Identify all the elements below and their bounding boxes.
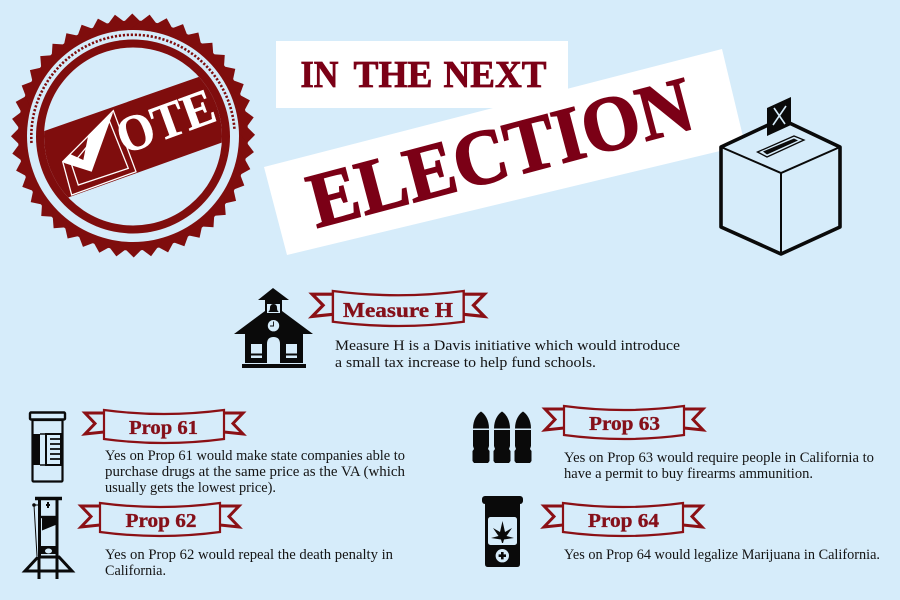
text: Measure H description: Measure H is a Davis initiative which would introduce [335, 338, 680, 354]
text: Prop 61 description [105, 448, 406, 496]
icon: medicine bottle [30, 412, 65, 482]
seal word: OTE: OTE [109, 79, 223, 166]
heading: in the next: IN [300, 54, 339, 96]
banner: Prop 61 [85, 410, 243, 443]
text: Prop 64 description: Yes on Prop 64 would legalize Marijuana in California. [564, 547, 880, 563]
banner: Measure H [312, 291, 484, 326]
icon: check box [63, 111, 136, 195]
banner: Prop 62 [81, 503, 239, 536]
ballot paper [767, 97, 791, 136]
banner: Prop 64 [544, 503, 702, 536]
banner: Prop 61: Prop 61 [129, 418, 198, 439]
icon: guillotine [25, 498, 72, 579]
text: Prop 63 description: Yes on Prop 63 would require people in California to [564, 450, 874, 466]
text: Prop 61 description: Yes on Prop 61 would make state companies able to [105, 448, 405, 464]
text: Prop 61 description: purchase drugs at the same price as the VA (which [105, 464, 406, 480]
text: Prop 62 description: California. [105, 563, 166, 579]
banner: Prop 62: Prop 62 [126, 511, 196, 532]
text: Measure H description: a small tax increase to help fund schools. [335, 355, 596, 371]
icon: vote seal [11, 14, 255, 258]
heading: in the next [276, 41, 568, 108]
ballot slot [758, 136, 804, 157]
banner: Prop 63: Prop 63 [589, 414, 660, 435]
icon: schoolhouse [234, 288, 313, 368]
text: Prop 62 description: Yes on Prop 62 would repeal the death penalty in [105, 547, 394, 563]
banner: Prop 64: Prop 64 [588, 511, 659, 532]
heading: election: ELECTION [299, 60, 702, 244]
icon: marijuana bottle [482, 496, 523, 567]
cannabis leaf [491, 521, 514, 543]
heading: in the next: NEXT [444, 54, 547, 96]
text: Prop 63 description: have a permit to buy firearms ammunition. [564, 466, 813, 482]
banner: Measure H: Measure H [343, 298, 453, 322]
text: Prop 62 description [105, 547, 394, 579]
icon: bullets [472, 412, 532, 463]
icon: ballot box [721, 97, 840, 254]
text: Measure H description [335, 338, 680, 371]
heading: in the next: THE [354, 54, 432, 96]
text: Prop 63 description [564, 450, 874, 482]
text: Prop 61 description: usually gets the lowest price). [105, 480, 276, 496]
banner: Prop 63 [545, 406, 703, 439]
